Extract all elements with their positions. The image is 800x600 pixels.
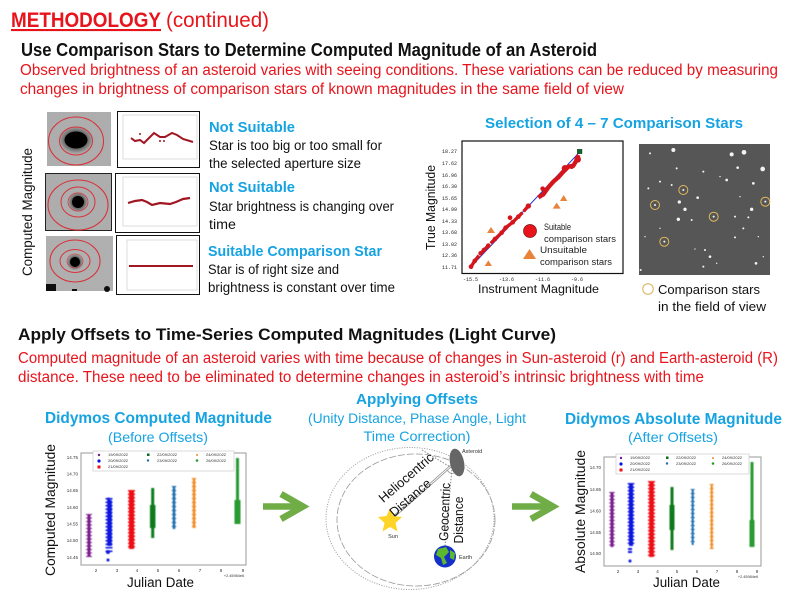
legend: comparison stars in the field of view: in the field of view (658, 300, 767, 314)
heading: selection of comparison stars: Selection of 4 – 7 Comparison Stars (485, 115, 743, 132)
heading: didymos absolute magnitude: Didymos Absolute Magnitude (565, 411, 782, 428)
chart: computed magnitude scatter: 14.50 (67, 538, 78, 543)
icon: asteroid: Asteroid (462, 449, 482, 455)
heading: applying offsets: (Unity Distance, Phase Angle, Light (308, 410, 526, 426)
axis label: absolute magnitude: Absolute Magnitude (572, 450, 588, 573)
heading: applying offsets: Time Correction) (364, 428, 470, 444)
text block: computed magnitude varies: distance. These need to be eliminated to determine changes in asteroid’s intrinsic brightness with time (18, 369, 704, 386)
y tick labels: -13.6 (499, 277, 514, 283)
y tick labels: 17.62 (442, 161, 457, 167)
text block: computed magnitude varies: Computed magnitude of an asteroid varies with time because of changes in Sun-asteroid (r) and Earth-asteroid (R) (18, 350, 778, 367)
legend: observation dates: 21/09/2022 (630, 467, 651, 472)
panel: suitable star image (46, 236, 113, 292)
label: geocentric distance: Geocentric (436, 482, 453, 541)
text block: observed brightness intro (20, 62, 778, 98)
heading: didymos absolute magnitude (565, 411, 782, 445)
chart: absolute magnitude scatter: 3 (637, 569, 640, 574)
chart: computed magnitude scatter: 2 (95, 568, 98, 573)
heading: applying offsets: Applying Offsets (356, 391, 478, 408)
text block: not suitable brightness (209, 179, 394, 232)
chart: computed magnitude scatter: 9 (242, 568, 245, 573)
chart: computed magnitude scatter: 7 (199, 568, 202, 573)
axis label: instrument magnitude: Instrument Magnitude (478, 282, 599, 296)
title (11, 9, 269, 32)
legend: observation dates (93, 451, 234, 471)
legend: suitable / unsuitable: Suitable (544, 222, 571, 232)
orbits (326, 448, 495, 590)
sight lines (390, 450, 454, 546)
legend: suitable / unsuitable: comparison stars (544, 234, 617, 244)
y tick labels: 18.27 (442, 149, 457, 155)
chart: computed magnitude scatter: 14.75 (67, 455, 78, 460)
icon: sun: Sun (388, 534, 398, 540)
chart: varying light curve 2 (116, 174, 200, 232)
chart: absolute magnitude scatter: 6 (696, 569, 699, 574)
text block: not suitable size: the selected aperture size (209, 156, 361, 171)
chart: absolute magnitude scatter: 2 (617, 569, 620, 574)
chart: computed magnitude scatter: 4 (136, 568, 139, 573)
text block: suitable comparison star: Star is of right size and (208, 262, 339, 277)
text block: not suitable brightness: Star brightness is changing over (209, 199, 394, 214)
chart: computed magnitude scatter: 3 (116, 568, 119, 573)
label: heliocentric distance: Distance (386, 476, 434, 520)
text block: not suitable size: Star is too big or too small for (209, 138, 382, 153)
chart: absolute magnitude scatter: 5 (676, 569, 679, 574)
text block: observed brightness intro: changes in brightness of comparison stars of known magnitudes in the same field of view (20, 81, 625, 98)
y tick labels: 13.68 (442, 230, 457, 236)
chart: absolute magnitude scatter: 14.50 (590, 551, 601, 556)
text block: computed magnitude varies (18, 350, 778, 386)
legend: observation dates: 22/09/2022 (676, 455, 697, 460)
icon: asteroid (447, 447, 482, 478)
text block: not suitable brightness: time (209, 217, 236, 232)
legend: comparison stars in the field of view (643, 283, 767, 314)
legend: observation dates: 20/09/2022 (630, 461, 651, 466)
y tick labels: 15.65 (442, 196, 457, 202)
chart: absolute magnitude scatter: 14.65 (590, 487, 601, 492)
chart: computed magnitude scatter: 6 (178, 568, 181, 573)
heading: apply offsets: Apply Offsets to Time-Series Computed Magnitudes (Light Curve) (18, 325, 556, 344)
legend: observation dates: 24/09/2022 (722, 455, 743, 460)
axis label: julian date: Julian Date (653, 575, 720, 590)
arrow: before to applying offsets (263, 494, 303, 519)
chart: constant light curve (116, 236, 200, 294)
title: METHODOLOGY (11, 9, 161, 32)
legend: suitable / unsuitable (523, 222, 617, 267)
legend: observation dates: 23/09/2022 (676, 461, 697, 466)
axis label: true magnitude: True Magnitude (424, 165, 438, 250)
chart: computed magnitude scatter: 14.55 (67, 522, 78, 526)
y tick labels: -9.6 (571, 277, 583, 283)
y tick labels: 13.02 (442, 242, 457, 248)
icon: earth (434, 546, 472, 568)
heading: didymos computed magnitude: (Before Offsets) (108, 429, 208, 445)
text block: not suitable brightness: Not Suitable (209, 179, 295, 196)
arrow: applying offsets to after (512, 494, 553, 519)
title: (continued) (166, 9, 269, 32)
label: geocentric distance (436, 482, 466, 544)
chart: absolute magnitude scatter: 8 (736, 569, 739, 574)
chart: varying light curve 1 (118, 112, 200, 168)
chart: absolute magnitude scatter: 7 (716, 569, 719, 574)
chart: absolute magnitude scatter: 9 (756, 569, 759, 574)
chart: absolute magnitude scatter: 4 (656, 569, 659, 574)
chart: absolute magnitude scatter: 14.70 (590, 465, 601, 470)
diagram: orbits of sun, earth and asteroid (326, 447, 495, 590)
data points (469, 149, 582, 269)
icon: earth: Earth (459, 555, 472, 561)
icon: sun (378, 508, 402, 540)
y tick labels (442, 149, 583, 283)
legend: suitable / unsuitable: comparison stars (540, 257, 613, 267)
axis label: computed magnitude: Computed Magnitude (20, 148, 35, 276)
chart: computed magnitude scatter: 14.60 (67, 505, 78, 510)
text block: suitable comparison star: brightness is constant over time (208, 280, 395, 295)
text block: not suitable size (209, 119, 382, 171)
chart: computed magnitude scatter: 14.65 (67, 488, 78, 493)
chart: true vs instrument magnitude (442, 141, 623, 283)
y tick labels: 12.36 (442, 253, 457, 259)
text block: suitable comparison star: Suitable Comparison Star (208, 243, 382, 260)
chart: computed magnitude scatter: 14.45 (67, 555, 78, 560)
legend: observation dates: 22/09/2022 (157, 452, 178, 457)
axis label: julian date: Julian Date (127, 575, 194, 590)
y tick labels: 11.71 (442, 265, 457, 271)
chart: absolute magnitude scatter (590, 454, 761, 579)
circled comparison stars (650, 186, 770, 246)
text block: suitable comparison star (208, 243, 395, 295)
text block: observed brightness intro: Observed brightness of an asteroid varies with seeing conditions. These variations can be reduced by measuring (20, 62, 778, 79)
chart: computed magnitude scatter: 5 (157, 568, 160, 573)
legend: observation dates: 19/09/2022 (630, 455, 651, 460)
heading: use comparison stars: Use Comparison Stars to Determine Computed Magnitude of an Asteroid (21, 40, 597, 60)
heading: didymos computed magnitude: Didymos Computed Magnitude (45, 410, 272, 427)
legend: observation dates: 21/09/2022 (108, 464, 129, 469)
label: geocentric distance: Distance (451, 496, 466, 544)
legend: comparison stars in the field of view: Comparison stars (658, 283, 760, 297)
legend: observation dates: 20/09/2022 (108, 458, 129, 463)
y tick labels: -11.6 (535, 277, 550, 283)
legend: observation dates: 19/09/2022 (108, 452, 129, 457)
y tick labels: -15.5 (463, 277, 478, 283)
heading: didymos absolute magnitude: (After Offsets) (628, 429, 718, 445)
y tick labels: 14.33 (442, 219, 457, 225)
legend: suitable / unsuitable: Unsuitable (540, 245, 587, 255)
chart: computed magnitude scatter (67, 451, 246, 578)
legend: observation dates: 26/09/2022 (206, 458, 227, 463)
chart: absolute magnitude scatter: 14.55 (590, 530, 601, 535)
chart: computed magnitude scatter: 8 (220, 568, 223, 573)
panel: not suitable star image 1 (47, 112, 111, 166)
text block: not suitable size: Not Suitable (209, 119, 295, 136)
panel: star field image (639, 144, 770, 275)
heading: applying offsets (308, 391, 526, 444)
legend: observation dates: 24/09/2022 (206, 452, 227, 457)
chart: absolute magnitude scatter: +2.45984e6 (738, 575, 758, 579)
panel: not suitable star image 2 (46, 174, 112, 230)
heading: didymos computed magnitude (45, 410, 272, 445)
legend: observation dates (616, 454, 749, 474)
axis label: computed magnitude: Computed Magnitude (42, 444, 58, 576)
legend: observation dates: 26/09/2022 (722, 461, 743, 466)
chart: computed magnitude scatter: +2.45984e6 (224, 574, 244, 578)
chart: absolute magnitude scatter: 14.60 (590, 508, 601, 514)
legend: observation dates: 23/09/2022 (157, 458, 178, 463)
label: heliocentric distance: Heliocentric (375, 449, 437, 506)
y tick labels: 16.30 (442, 184, 457, 190)
y tick labels: 14.99 (442, 207, 457, 213)
chart: computed magnitude scatter: 14.70 (67, 472, 78, 476)
y tick labels: 16.96 (442, 173, 457, 179)
